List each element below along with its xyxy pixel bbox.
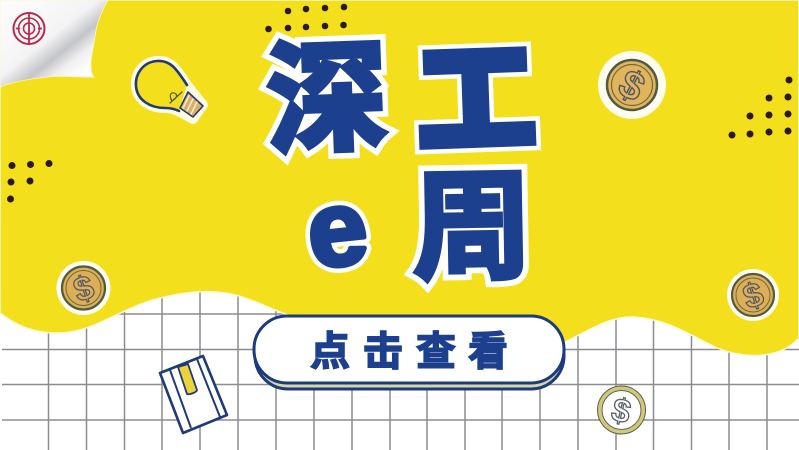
coin: outline on grid: $ <box>608 390 635 431</box>
button label <box>310 330 508 374</box>
coin: left <box>56 261 110 315</box>
icon: light bulb <box>136 61 203 119</box>
button label: 击 <box>363 330 403 374</box>
button: click to view <box>254 316 564 389</box>
coin: right: $ <box>738 275 768 317</box>
title: e: e <box>302 167 373 291</box>
title: 深: 深 <box>265 31 389 169</box>
page curl corner <box>0 0 108 87</box>
dots: top <box>265 4 347 32</box>
grid background <box>2 290 799 450</box>
title: 工: 工 <box>416 33 536 167</box>
title: 周: 周 <box>411 160 533 296</box>
button label: 点 <box>310 330 350 374</box>
title: 工: 工 <box>416 33 536 167</box>
title: 周: 周 <box>411 160 533 296</box>
coin: outline on grid <box>598 386 646 434</box>
button label: 看 <box>468 330 508 374</box>
coin: top right <box>598 51 666 119</box>
title: e: e <box>302 167 373 291</box>
button label: 查 <box>416 330 456 374</box>
title: 深: 深 <box>265 31 389 169</box>
icon: notebook <box>160 356 227 433</box>
coin: top right: $ <box>611 61 652 111</box>
icon: union logo <box>14 13 44 44</box>
yellow wave background <box>0 0 799 356</box>
coin: right <box>727 269 779 321</box>
dots: left <box>7 160 52 202</box>
dots: right <box>728 76 792 138</box>
coin: left: $ <box>69 268 99 310</box>
